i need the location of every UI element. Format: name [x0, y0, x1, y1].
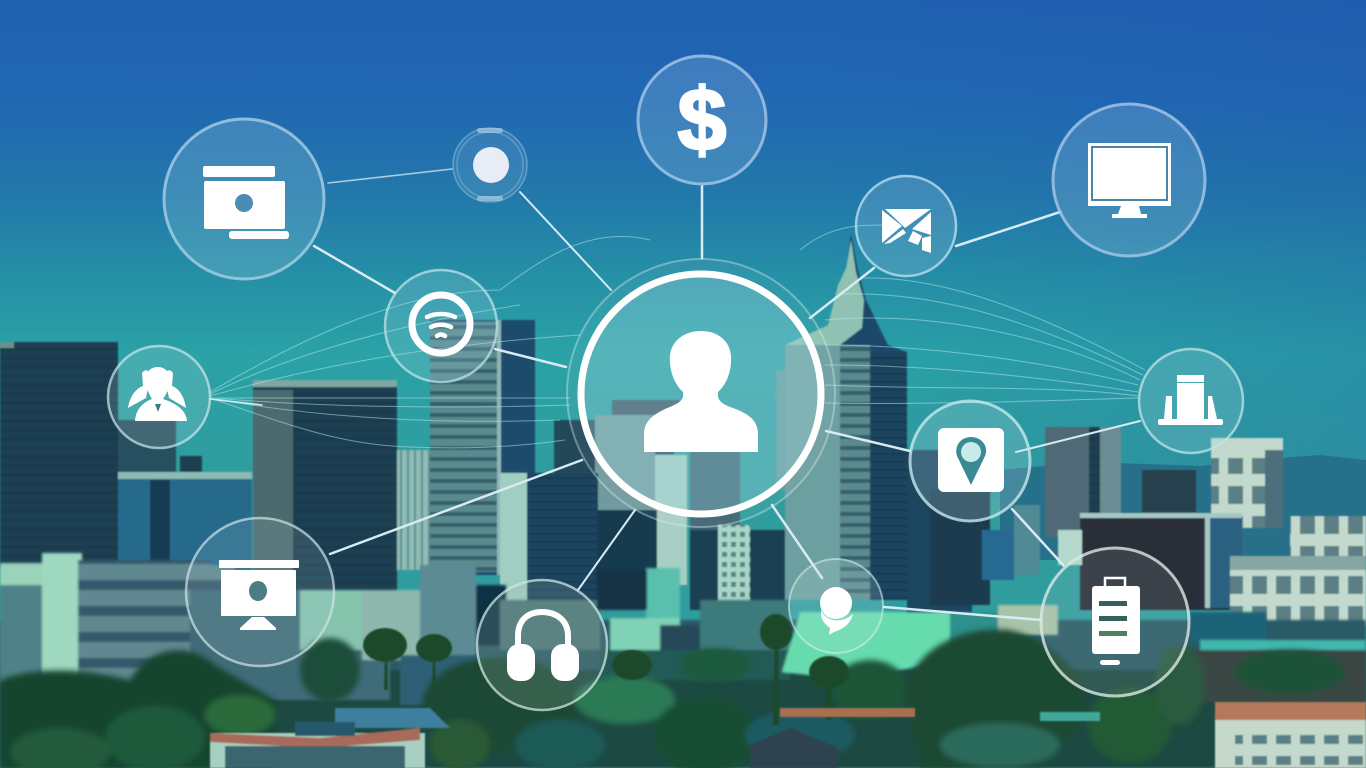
icon: battery [1092, 578, 1140, 665]
node: chat [789, 559, 883, 653]
small teal tower [646, 568, 680, 618]
node: envelope [856, 176, 956, 276]
dark tower left of centre [253, 380, 397, 595]
node: pin [910, 401, 1030, 521]
icon: team [128, 367, 187, 421]
icon: person [644, 331, 758, 452]
roof house centre [750, 728, 838, 768]
icon: map pin [938, 428, 1004, 492]
light green building left [0, 553, 82, 683]
mint building [782, 605, 1058, 680]
brown block [1080, 513, 1242, 610]
blue grid tower [500, 473, 598, 603]
orange roof building right [1215, 702, 1366, 768]
centre towers [554, 400, 740, 585]
icon: terminal [1158, 375, 1223, 425]
spire tower [776, 234, 907, 600]
node: dollar [638, 56, 766, 184]
icon: wifi [412, 295, 470, 353]
icon: dot [473, 147, 509, 183]
blue low block [118, 472, 252, 571]
node: headphones [477, 580, 607, 710]
offices right edge [1230, 516, 1366, 626]
roof strip [780, 708, 915, 717]
small beige tower [397, 450, 431, 570]
icon: dollar sign: $ [678, 70, 726, 169]
tower far left [0, 342, 202, 567]
connector lines [210, 169, 1140, 620]
node: printer [1139, 349, 1243, 453]
skyline: low foreground buildings [0, 553, 1366, 705]
dark blocks behind centre [597, 510, 657, 590]
grey floored building [78, 560, 210, 685]
node: wifi [385, 270, 497, 382]
node: battery [1041, 548, 1189, 696]
roof building centre-left [210, 708, 450, 768]
dark tower beside pin [907, 450, 972, 620]
node: browser card [164, 119, 324, 279]
node: support team [108, 346, 210, 448]
dark ground base of the lower city [0, 620, 1366, 768]
icon: browser [203, 166, 289, 239]
node: small dot [453, 128, 527, 202]
striped tall tower [430, 320, 535, 575]
node: monitor [1053, 104, 1205, 256]
teal mid buildings [300, 590, 362, 650]
trees and low-rise foreground [0, 629, 1345, 768]
palm trees [363, 614, 849, 725]
node: screen [186, 518, 334, 666]
blue awning right [1190, 612, 1366, 702]
white tower right [1211, 438, 1283, 528]
grey tower right [1045, 427, 1121, 537]
icon: presentation screen [219, 560, 299, 630]
icon: chat bubble [820, 587, 853, 635]
node: central user [567, 259, 835, 527]
rooftops foreground [210, 702, 1366, 768]
icon: envelope [882, 209, 931, 253]
icon: headphones [507, 612, 579, 681]
skyline: distant and mid towers [0, 234, 1366, 626]
fine curved data lines [210, 225, 1145, 448]
icon: monitor [1088, 143, 1171, 218]
distant hills [1000, 455, 1366, 560]
